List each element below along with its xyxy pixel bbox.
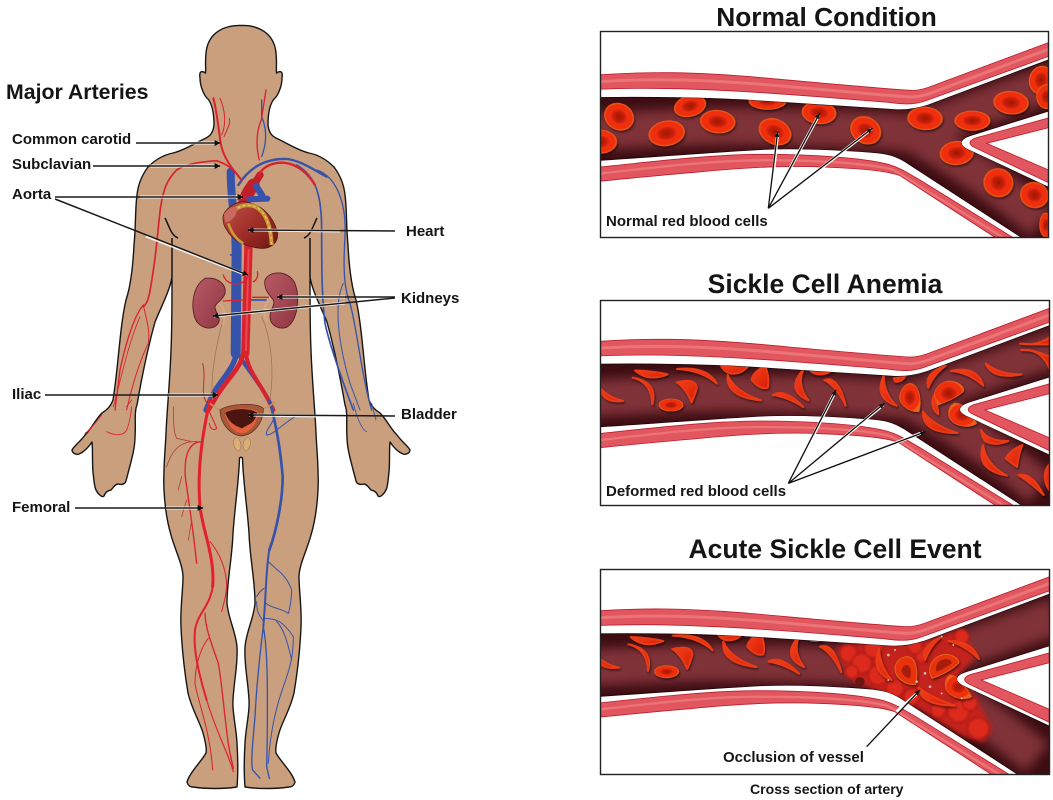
ureters: [212, 317, 272, 400]
label: bladder: Bladder: [401, 406, 457, 423]
clot mass: [837, 629, 992, 742]
pointer lines: deformed cells: [788, 390, 926, 483]
sickled cells and occlusion clot: [596, 629, 992, 742]
pointer line: occlusion: [867, 690, 920, 747]
sickled cells upstream: [596, 631, 841, 678]
panel: major arteries anatomy: [6, 25, 459, 789]
caption: cross section of artery: Cross section of artery: [750, 781, 904, 797]
panel border: sickle cell anemia: [600, 300, 1050, 506]
leg veins: [252, 400, 376, 778]
icon: heart: [223, 186, 278, 248]
artery wall and lumen: [601, 576, 1049, 774]
icon: kidney left: [193, 278, 225, 328]
sickled red blood cells: [600, 336, 1052, 495]
label: femoral: Femoral: [12, 499, 70, 516]
enlarged cells in clot: [876, 638, 979, 706]
artery wall and lumen: [601, 42, 1048, 237]
panel border: acute sickle cell event: [600, 570, 1050, 774]
icon: kidney right: [264, 273, 298, 328]
heading: major arteries: Major Arteries: [6, 80, 148, 104]
artery wall and lumen: [601, 308, 1049, 505]
panel: sickle cell anemia: [601, 308, 1049, 505]
panel: acute sickle cell event: [601, 576, 1049, 774]
fork wall: [968, 384, 1049, 451]
label: common carotid: Common carotid: [12, 131, 131, 148]
body silhouette: [72, 25, 410, 789]
fork wall: [965, 651, 1053, 726]
icon: bladder: [210, 402, 275, 436]
label: deformed red blood cells: Deformed red blood cells: [606, 483, 786, 500]
icon: pubic bone: [234, 437, 250, 451]
label: iliac: Iliac: [12, 386, 41, 403]
upper body vessels and organs: [113, 90, 372, 410]
label: normal red blood cells: Normal red blood cells: [606, 213, 768, 230]
label: occlusion of vessel: Occlusion of vessel: [723, 749, 864, 766]
heading: sickle cell anemia: Sickle Cell Anemia: [708, 269, 943, 299]
label: kidneys: [213, 290, 459, 316]
panel border: normal condition: [600, 32, 1048, 238]
label: kidneys: Kidneys: [401, 290, 459, 307]
panel: normal condition: [601, 42, 1048, 237]
label: subclavian: Subclavian: [12, 156, 91, 173]
heading: acute sickle cell event: Acute Sickle Cell Event: [688, 534, 982, 564]
label: aorta: [12, 186, 248, 275]
leg arteries: [85, 400, 233, 772]
lower body vessels and bladder: [85, 400, 376, 778]
heading: normal condition: Normal Condition: [716, 2, 937, 32]
pointer lines: normal cells: [768, 113, 872, 208]
fork wall: [970, 118, 1048, 183]
clot specks: [887, 636, 963, 699]
aorta and arteries: [113, 90, 315, 410]
normal red blood cells: [583, 63, 1053, 237]
veins of torso and right arm: [206, 100, 372, 410]
label: aorta: Aorta: [12, 186, 52, 203]
label: heart: Heart: [406, 223, 444, 240]
